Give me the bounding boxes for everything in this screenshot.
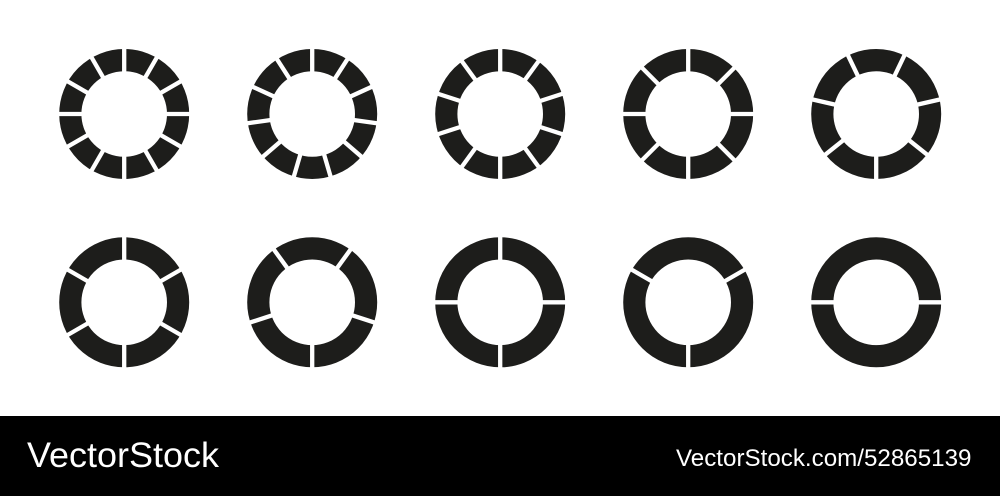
ring: 6 segments: [65, 234, 183, 370]
footer brand name: VectorStock: [27, 435, 219, 475]
footer bar: [0, 416, 1000, 496]
ring: 8 segments: [620, 46, 756, 182]
ring: 10 segments: [436, 46, 565, 182]
ring: 4 segments: [432, 234, 568, 370]
ring: 5 segments: [248, 247, 377, 370]
ring: 3 segments: [629, 248, 747, 370]
ring: 12 segments: [56, 46, 192, 182]
ring: 2 segments: [808, 248, 944, 356]
ring: 11 segments: [245, 46, 380, 179]
footer image URL: VectorStock.com/52865139: [676, 446, 972, 472]
ring: 7 segments: [810, 53, 942, 182]
